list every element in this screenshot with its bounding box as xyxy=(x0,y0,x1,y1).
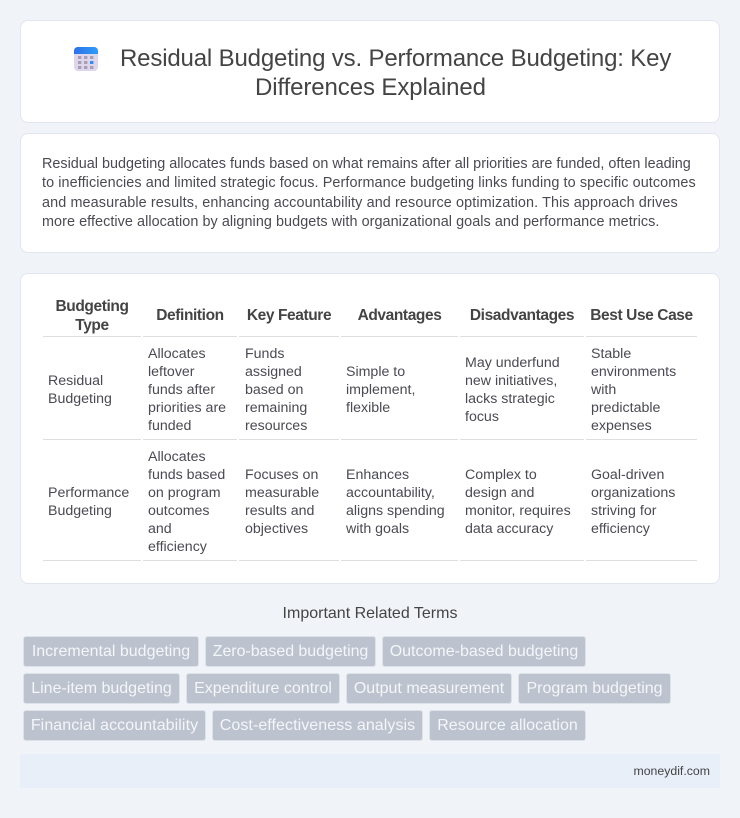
panel: title card xyxy=(20,20,720,123)
row: Residual disadvantages: focus xyxy=(465,409,499,425)
tag xyxy=(346,673,512,704)
row: Performance definition: funds based xyxy=(148,467,225,483)
text block: summary: and measurable results, enhancing accountability and resource optimization. This approach drives xyxy=(42,195,678,211)
row: Performance definition: outcomes xyxy=(148,503,210,519)
row: Residual definition: funded xyxy=(148,418,191,434)
table header: Budgeting Type: Type xyxy=(75,317,109,334)
row: Performance Budgeting type xyxy=(48,485,129,519)
row: Performance key feature: results and xyxy=(245,503,314,519)
tag: Cost-effectiveness analysis xyxy=(220,717,415,734)
tag xyxy=(518,673,671,704)
text block: summary xyxy=(42,156,696,230)
row: Residual disadvantages: May underfund xyxy=(465,355,560,371)
row: Performance advantages: aligns spending xyxy=(346,503,445,519)
row: Performance key feature xyxy=(245,467,319,537)
row: Residual Budgeting type: Residual xyxy=(48,373,103,389)
row: Performance advantages xyxy=(346,467,445,537)
tag xyxy=(429,710,586,741)
row: Performance Budgeting type: Budgeting xyxy=(48,503,112,519)
row: Residual best use case: expenses xyxy=(591,418,652,434)
tag xyxy=(23,636,199,667)
tag: Zero-based budgeting xyxy=(213,643,368,660)
table header: Key Feature: Key Feature xyxy=(247,307,331,324)
row: Performance best use case xyxy=(591,467,675,537)
tag: Incremental budgeting xyxy=(32,643,190,660)
row: Residual definition: leftover xyxy=(148,364,195,380)
row: Performance advantages: with goals xyxy=(346,521,409,537)
row: Performance best use case: efficiency xyxy=(591,521,650,537)
row: Performance key feature: measurable xyxy=(245,485,319,501)
tag xyxy=(205,636,376,667)
tag list: related terms xyxy=(23,636,671,741)
text block: summary: to inefficiencies and limited strategic focus. Performance budgeting links funding to specific outcomes xyxy=(42,175,696,191)
tag: Output measurement xyxy=(354,680,504,697)
tag: Expenditure control xyxy=(194,680,332,697)
panel: comparison table xyxy=(20,273,720,584)
row: Performance key feature: Focuses on xyxy=(245,467,318,483)
row: Residual disadvantages: new initiatives, xyxy=(465,373,557,389)
row: Residual best use case: environments xyxy=(591,364,676,380)
row: Residual key feature: assigned xyxy=(245,364,302,380)
table header: Advantages: Advantages xyxy=(358,307,441,324)
row: Performance best use case: Goal-driven xyxy=(591,467,664,483)
row: Performance definition: on program xyxy=(148,485,221,501)
row: Performance advantages: accountability, xyxy=(346,485,435,501)
footer bar xyxy=(20,754,720,788)
panel: summary paragraph xyxy=(20,133,720,253)
row: Performance Budgeting type: Performance xyxy=(48,485,129,501)
tag xyxy=(382,636,586,667)
tag: Resource allocation xyxy=(437,717,578,734)
row: Residual advantages: Simple to xyxy=(346,364,405,380)
row: Residual best use case: with xyxy=(591,382,616,398)
row: Residual best use case: Stable xyxy=(591,346,631,362)
row: Performance disadvantages xyxy=(465,467,571,537)
row: Residual definition: Allocates xyxy=(148,346,206,362)
title: Residual Budgeting vs. Performance Budgeting: Key xyxy=(120,45,671,72)
tag xyxy=(23,710,206,741)
table header: Budgeting Type: Budgeting xyxy=(55,298,129,315)
row: Residual Budgeting type: Budgeting xyxy=(48,391,112,407)
row: Performance disadvantages: design and xyxy=(465,485,534,501)
icon: calendar xyxy=(74,47,98,71)
row: Performance advantages: Enhances xyxy=(346,467,409,483)
row: Performance disadvantages: data accuracy xyxy=(465,521,553,537)
table: budgeting comparison xyxy=(43,298,697,561)
tag xyxy=(186,673,340,704)
tag xyxy=(23,673,180,704)
row: Residual key feature xyxy=(245,346,307,434)
row: Residual advantages xyxy=(346,364,415,416)
tag xyxy=(212,710,423,741)
row: Residual advantages: flexible xyxy=(346,400,390,416)
table header: Best Use Case: Best Use Case xyxy=(590,307,693,324)
tag: Program budgeting xyxy=(526,680,663,697)
row: Performance key feature: objectives xyxy=(245,521,308,537)
row: Residual best use case xyxy=(591,346,676,434)
row: Residual definition xyxy=(148,346,226,434)
row: Residual best use case: predictable xyxy=(591,400,660,416)
row: Residual advantages: implement, xyxy=(346,382,415,398)
title: Differences Explained xyxy=(255,74,486,101)
row: Residual definition: priorities are xyxy=(148,400,226,416)
row: Performance best use case: striving for xyxy=(591,503,656,519)
tag: Financial accountability xyxy=(31,717,198,734)
row: Residual disadvantages xyxy=(465,355,560,425)
footer source text: moneydif.com xyxy=(633,764,710,778)
table header: Definition: Definition xyxy=(156,307,224,324)
tag: Line-item budgeting xyxy=(31,680,172,697)
row: Performance definition: Allocates xyxy=(148,449,206,465)
title xyxy=(120,45,672,101)
text block: summary: Residual budgeting allocates funds based on what remains after all priorities are funded, often leading xyxy=(42,156,691,172)
row: Residual definition: funds after xyxy=(148,382,215,398)
row: Residual disadvantages: lacks strategic xyxy=(465,391,555,407)
row: Performance definition: and xyxy=(148,521,172,537)
row: Performance best use case: organizations xyxy=(591,485,675,501)
tag: Outcome-based budgeting xyxy=(390,643,578,660)
row: Performance definition xyxy=(148,449,225,555)
row: Residual key feature: resources xyxy=(245,418,307,434)
row: Residual key feature: based on xyxy=(245,382,303,398)
table header: Disadvantages: Disadvantages xyxy=(470,307,574,324)
row: Performance disadvantages: Complex to xyxy=(465,467,537,483)
row: Residual key feature: remaining xyxy=(245,400,307,416)
text block: summary: more effective allocation by aligning budgets with organizational goals and performance metrics. xyxy=(42,214,659,230)
row: Performance definition: efficiency xyxy=(148,539,207,555)
row: Performance disadvantages: monitor, requires xyxy=(465,503,571,519)
row: Residual Budgeting type xyxy=(48,373,112,407)
table header: Budgeting Type xyxy=(55,298,129,334)
row: Residual key feature: Funds xyxy=(245,346,284,362)
heading: Important Related Terms: Important Related Terms xyxy=(283,605,457,622)
